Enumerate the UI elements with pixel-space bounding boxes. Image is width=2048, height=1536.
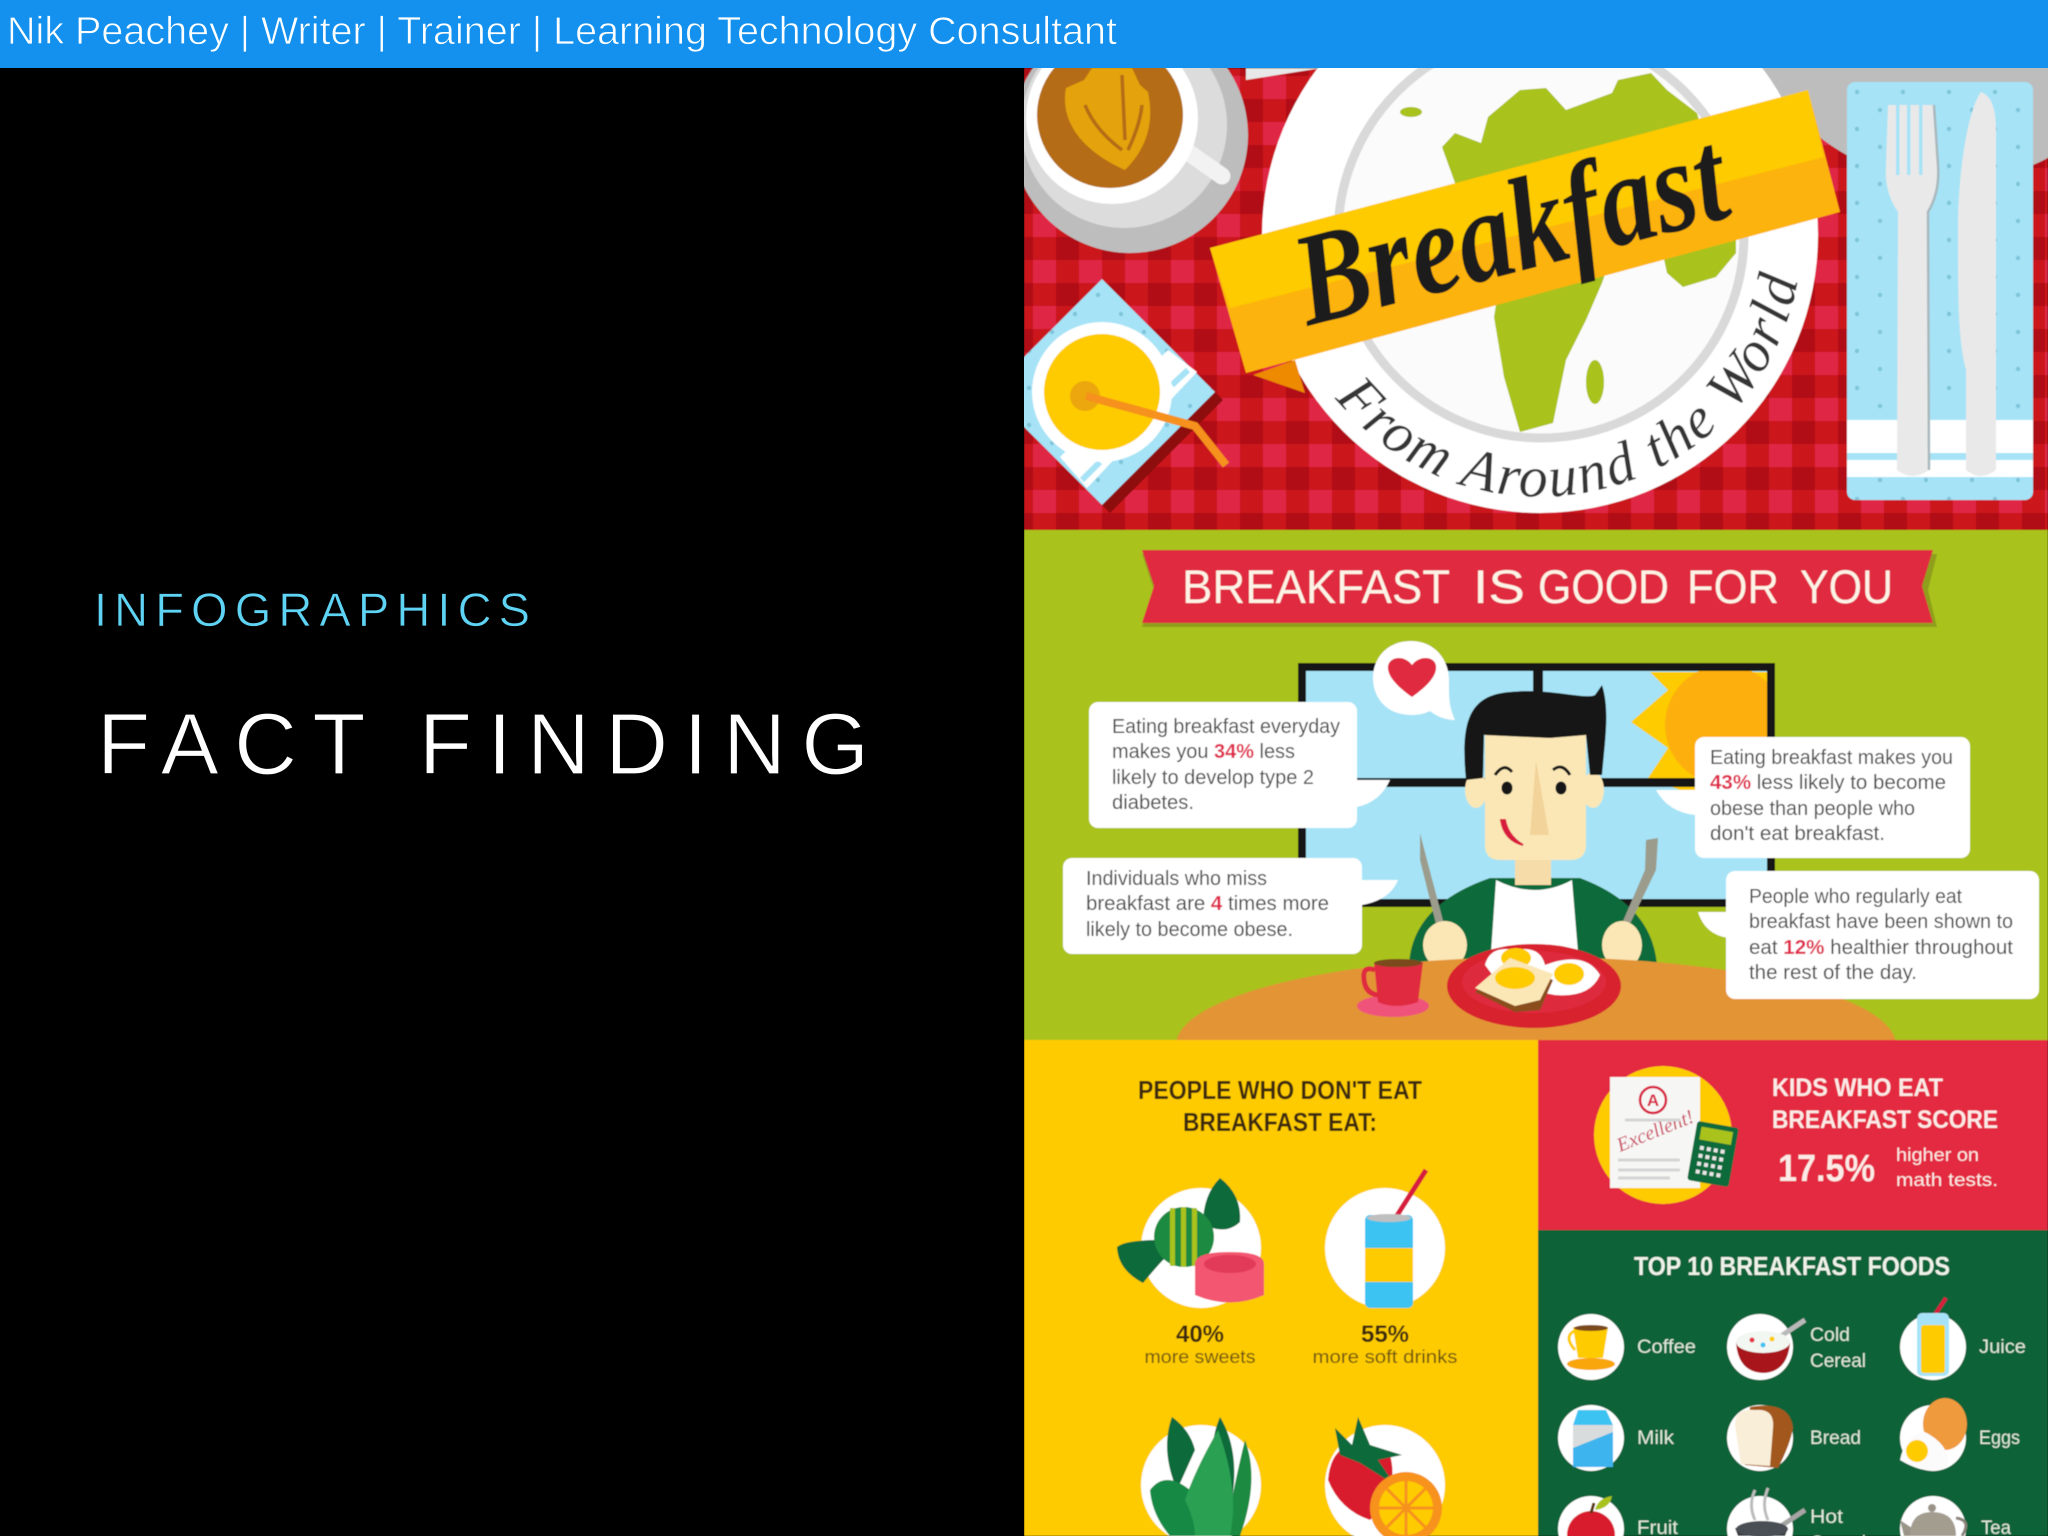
food: eggs bbox=[1900, 1398, 2020, 1471]
fork bbox=[1886, 105, 1938, 476]
stat: soft drinks bbox=[1313, 1324, 1458, 1364]
heading: top 10: TOP 10 BREAKFAST FOODS bbox=[1634, 1251, 1950, 1281]
food: juice: Juice bbox=[1979, 1337, 2026, 1358]
food: cold cereal: Cold bbox=[1810, 1325, 1850, 1346]
panel: top 10 breakfast foods bbox=[1538, 1230, 2048, 1536]
infographic bbox=[1024, 68, 2048, 1536]
icon: red cup bbox=[1357, 959, 1429, 1017]
food: bread: Bread bbox=[1810, 1428, 1861, 1449]
icon: juice glass on napkin bbox=[1024, 278, 1230, 513]
title: breakfast: Breakfast bbox=[1277, 101, 1744, 354]
banner text bbox=[1184, 569, 1891, 604]
icon: exam paper and calculator: Excellent! bbox=[1613, 1106, 1697, 1157]
heading: kids who eat bbox=[1772, 1074, 1998, 1134]
callout: healthier bbox=[1698, 871, 2039, 999]
food: hot cereal: Hot bbox=[1810, 1507, 1844, 1528]
callout: diabetes bbox=[1089, 702, 1390, 828]
character bbox=[1409, 685, 1658, 969]
heading: kids who eat: BREAKFAST SCORE bbox=[1772, 1106, 1998, 1134]
callout: obese: Eating breakfast makes you bbox=[1710, 747, 1953, 769]
food: cold cereal: Cereal bbox=[1810, 1351, 1866, 1372]
callout: four times bbox=[1063, 858, 1398, 954]
callout: healthier: breakfast have been shown to bbox=[1749, 911, 2013, 933]
panel heading bbox=[1138, 1080, 1422, 1132]
callout: healthier: eat 12% healthier throughout bbox=[1749, 937, 2013, 959]
stat: soft drinks: more soft drinks bbox=[1312, 1347, 1458, 1367]
food: milk bbox=[1558, 1405, 1675, 1471]
stat: soft drinks: 55% bbox=[1361, 1321, 1409, 1348]
stat: sweets bbox=[1145, 1324, 1256, 1364]
callout: four times: Individuals who miss bbox=[1086, 868, 1267, 890]
food: bread bbox=[1727, 1405, 1861, 1471]
banner text: IS bbox=[1473, 560, 1525, 613]
callout: obese: don't eat breakfast. bbox=[1710, 823, 1885, 845]
table bbox=[1176, 957, 1896, 1041]
window bbox=[1298, 663, 1785, 907]
callout: healthier: People who regularly eat bbox=[1749, 886, 1962, 908]
gray plate top right bbox=[1738, 0, 2048, 182]
header bar bbox=[0, 0, 2048, 68]
food: hot cereal bbox=[1727, 1488, 1866, 1536]
icon: soft drink bbox=[1325, 1170, 1445, 1308]
fork held bbox=[1620, 838, 1658, 928]
icon: sweets bbox=[1117, 1178, 1264, 1308]
title ribbon bbox=[1210, 90, 1840, 393]
callout: obese bbox=[1656, 737, 1970, 858]
panel: kids who eat breakfast bbox=[1538, 1040, 2048, 1230]
icon: plate of eggs and toast bbox=[1447, 944, 1621, 1028]
plate subtitle: From Around the World bbox=[1334, 270, 1798, 498]
stat label bbox=[1896, 1145, 1998, 1190]
slide title: fact finding: FACT FINDING bbox=[97, 696, 869, 793]
callout: four times: likely to become obese. bbox=[1086, 919, 1293, 941]
header text: Nik Peachey | Writer | Trainer | Learning Technology Consultant bbox=[7, 10, 1117, 53]
callout: four times: breakfast are 4 times more bbox=[1086, 893, 1329, 915]
sun bbox=[1631, 672, 1767, 800]
stat: sweets: more sweets bbox=[1144, 1347, 1256, 1367]
stat: sweets: 40% bbox=[1176, 1321, 1224, 1348]
food: coffee: Coffee bbox=[1637, 1337, 1696, 1358]
banner text: FOR bbox=[1687, 560, 1779, 613]
white wedge bbox=[1246, 68, 1322, 80]
knife held bbox=[1420, 833, 1445, 928]
callout: obese: obese than people who bbox=[1710, 798, 1915, 820]
panel: table top header bbox=[1024, 68, 2048, 531]
icon: cutlery on napkin bbox=[1847, 82, 2033, 500]
callout: obese: 43% less likely to become bbox=[1710, 772, 1946, 794]
callout: diabetes: likely to develop type 2 bbox=[1112, 767, 1314, 789]
icon: exam paper and calculator bbox=[1594, 1066, 1739, 1204]
food: juice bbox=[1900, 1298, 2026, 1380]
panel: people who don't eat breakfast bbox=[1024, 1040, 1538, 1536]
stat label: higher on bbox=[1896, 1145, 1979, 1165]
banner bbox=[1142, 550, 1937, 627]
food: fruit bbox=[1558, 1496, 1679, 1536]
callout: healthier: the rest of the day. bbox=[1749, 962, 1917, 984]
panel: breakfast is good for you bbox=[1024, 530, 2048, 1133]
callout: diabetes: Eating breakfast everyday bbox=[1112, 716, 1340, 738]
food: tea bbox=[1900, 1496, 2011, 1536]
food: eggs: Eggs bbox=[1979, 1428, 2020, 1449]
icon: heart bubble bbox=[1373, 641, 1455, 720]
stat label: math tests. bbox=[1896, 1170, 1998, 1190]
callout: diabetes: makes you 34% less bbox=[1112, 741, 1295, 763]
banner text: YOU bbox=[1800, 560, 1893, 613]
panel heading: PEOPLE WHO DON'T EAT bbox=[1138, 1075, 1422, 1105]
food: cold cereal bbox=[1727, 1314, 1866, 1380]
banner text: GOOD bbox=[1538, 560, 1669, 613]
icon: fruit bbox=[1325, 1417, 1445, 1536]
heading: kids who eat: KIDS WHO EAT bbox=[1772, 1074, 1943, 1102]
icon: coffee cup bbox=[1024, 68, 1249, 254]
callout: diabetes: diabetes. bbox=[1112, 792, 1194, 814]
knife bbox=[1958, 92, 1996, 476]
food: coffee bbox=[1558, 1314, 1696, 1380]
food: milk: Milk bbox=[1637, 1428, 1675, 1449]
icon: spinach bbox=[1141, 1417, 1261, 1536]
icon: exam paper and calculator: A bbox=[1647, 1091, 1659, 1110]
section label: infographics: INFOGRAPHICS bbox=[94, 583, 530, 636]
stat: 17.5%: 17.5% bbox=[1778, 1148, 1875, 1190]
panel heading: BREAKFAST EAT: bbox=[1183, 1107, 1377, 1137]
icon: plate with world map bbox=[1261, 68, 1819, 514]
banner text: BREAKFAST bbox=[1182, 560, 1450, 613]
